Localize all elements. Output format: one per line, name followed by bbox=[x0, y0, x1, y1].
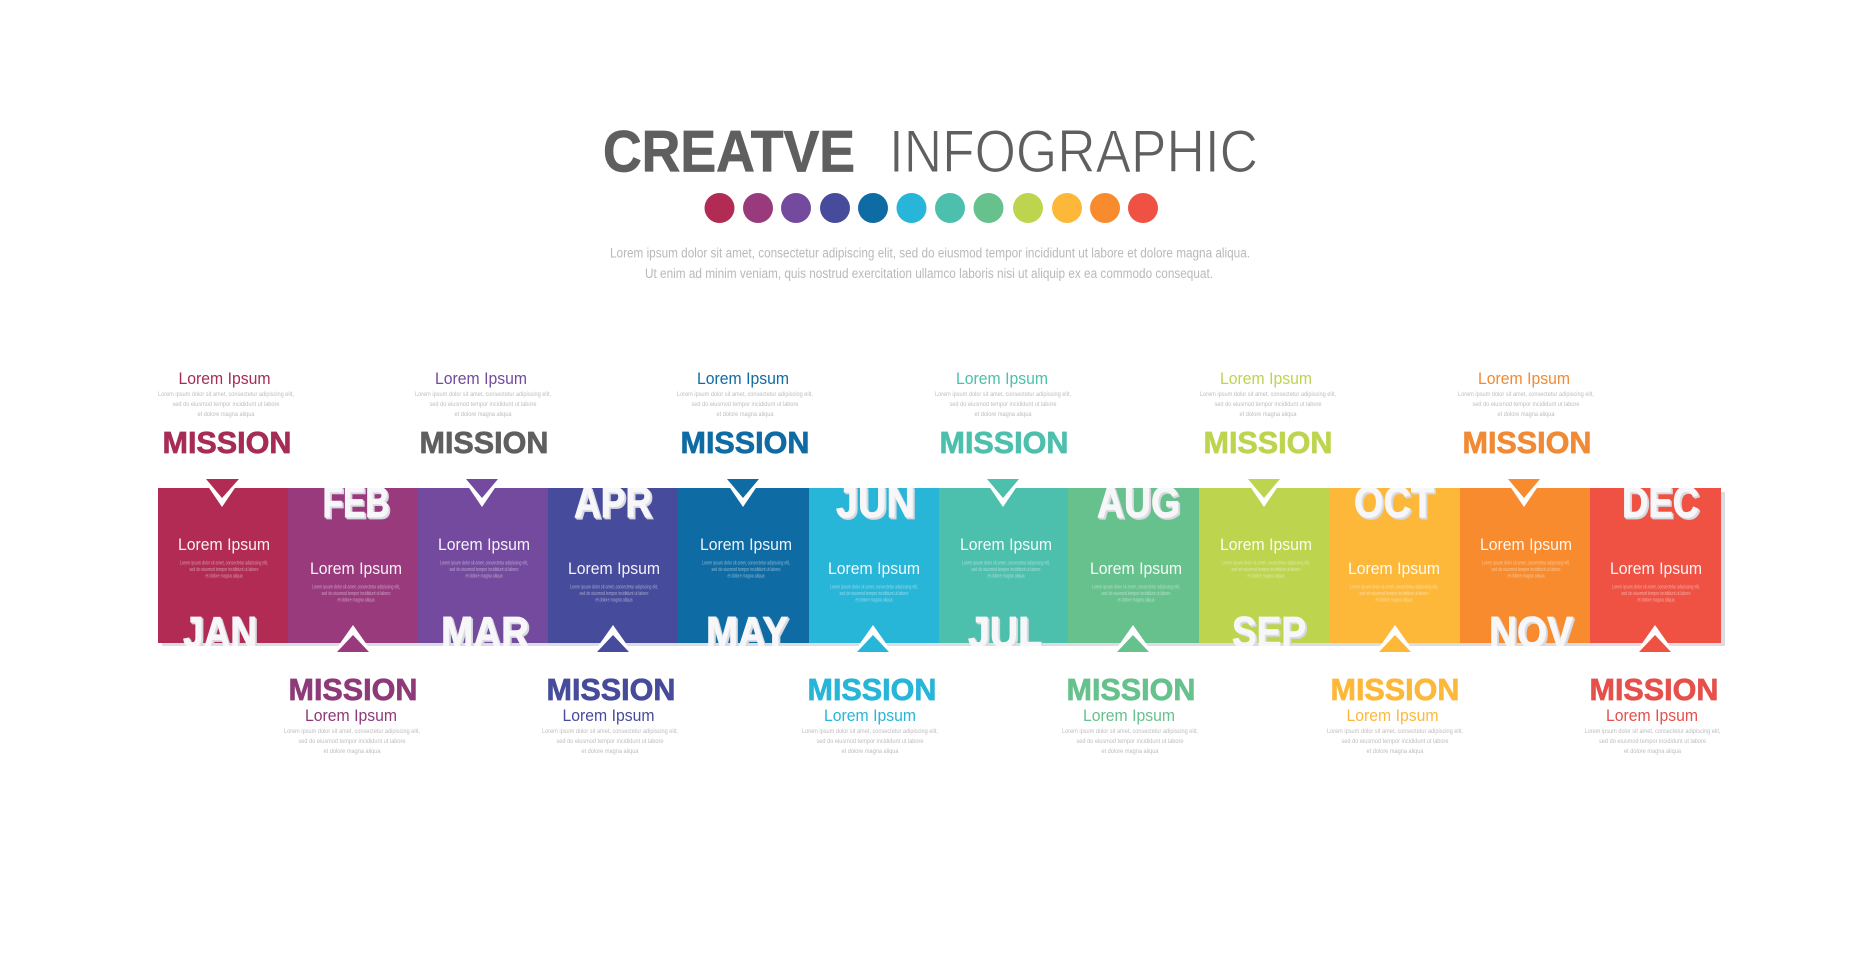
bottom callout: August: MISSION bbox=[1066, 672, 1196, 707]
top callout: July: sed do eiusmod tempor incididunt ut labore bbox=[950, 401, 1057, 408]
bottom callout: June: Lorem Ipsum bbox=[824, 706, 916, 725]
column inner text: sed do eiusmod tempor incididunt ut labore bbox=[1360, 591, 1429, 597]
bottom callout: February bbox=[284, 625, 420, 755]
column inner text: Lorem ipsum dolor sit amet, consectetur adipiscing elit, bbox=[570, 584, 658, 590]
colour dots row bbox=[704, 193, 1158, 223]
bottom callout: April: Lorem Ipsum bbox=[562, 706, 654, 725]
top callout: July: MISSION bbox=[940, 425, 1068, 460]
column inner text: sed do eiusmod tempor incididunt ut labore bbox=[322, 591, 391, 597]
subtitle text: Ut enim ad minim veniam, quis nostrud exercitation ullamco laboris nisi ut aliquip ex ea commodo consequat. bbox=[645, 266, 1213, 281]
column inner text: sed do eiusmod tempor incididunt ut labore bbox=[190, 567, 259, 573]
column inner text: sed do eiusmod tempor incididunt ut labore bbox=[972, 567, 1041, 573]
bottom callout: December bbox=[1584, 625, 1721, 755]
top callout: January: et dolore magna aliqua bbox=[198, 411, 255, 418]
month labels: FEB bbox=[322, 478, 390, 527]
column inner text: Lorem Ipsum bbox=[828, 559, 920, 578]
bottom callout: June: MISSION bbox=[808, 672, 936, 707]
column inner text: Lorem Ipsum bbox=[1348, 559, 1440, 578]
top callout: November: Lorem ipsum dolor sit amet, consectetur adipiscing elit, bbox=[1458, 391, 1594, 398]
top callout: January: Lorem ipsum dolor sit amet, consectetur adipiscing elit, bbox=[158, 391, 294, 398]
month labels: JUL bbox=[968, 608, 1042, 657]
month labels bbox=[183, 488, 1700, 646]
column inner text: Lorem Ipsum bbox=[1220, 535, 1312, 554]
bottom callout: February: Lorem ipsum dolor sit amet, consectetur adipiscing elit, bbox=[284, 728, 420, 735]
top callout: September: Lorem Ipsum bbox=[1220, 369, 1312, 388]
bottom callout: February: MISSION bbox=[288, 672, 418, 707]
column inner text: Lorem ipsum dolor sit amet, consectetur adipiscing elit, bbox=[962, 560, 1050, 566]
bottom callout: October: sed do eiusmod tempor incididunt ut labore bbox=[1342, 738, 1449, 745]
column inner text: sed do eiusmod tempor incididunt ut labore bbox=[1232, 567, 1301, 573]
bottom callout: August bbox=[1062, 625, 1198, 755]
top callout: January: Lorem Ipsum bbox=[178, 369, 270, 388]
top callout: May bbox=[677, 369, 813, 507]
bottom callout: October: et dolore magna aliqua bbox=[1366, 748, 1424, 755]
column inner text: sed do eiusmod tempor incididunt ut labore bbox=[450, 567, 519, 573]
bottom callout: June: Lorem ipsum dolor sit amet, consectetur adipiscing elit, bbox=[802, 728, 938, 735]
column inner text: Lorem ipsum dolor sit amet, consectetur adipiscing elit, bbox=[1482, 560, 1570, 566]
column inner text: Lorem ipsum dolor sit amet, consectetur adipiscing elit, bbox=[1350, 584, 1438, 590]
top callout: March: Lorem ipsum dolor sit amet, consectetur adipiscing elit, bbox=[415, 391, 551, 398]
column inner text: sed do eiusmod tempor incididunt ut labore bbox=[580, 591, 649, 597]
column inner text: Lorem Ipsum bbox=[700, 535, 792, 554]
top callout: November: sed do eiusmod tempor incididunt ut labore bbox=[1472, 401, 1580, 408]
column inner text: sed do eiusmod tempor incididunt ut labore bbox=[1622, 591, 1691, 597]
bottom callout: December: sed do eiusmod tempor incididunt ut labore bbox=[1599, 738, 1706, 745]
column inner text: et dolore magna aliqua bbox=[1248, 574, 1285, 580]
top callout: May: et dolore magna aliqua bbox=[716, 411, 774, 418]
column inner text: Lorem Ipsum bbox=[1480, 535, 1572, 554]
bottom callout: December: Lorem ipsum dolor sit amet, consectetur adipiscing elit, bbox=[1584, 728, 1721, 735]
top callout: May: sed do eiusmod tempor incididunt ut labore bbox=[692, 401, 799, 408]
bottom callout: April: et dolore magna aliqua bbox=[582, 748, 639, 755]
bottom callout: December: Lorem Ipsum bbox=[1606, 706, 1698, 725]
column inner text: sed do eiusmod tempor incididunt ut labore bbox=[712, 567, 781, 573]
bottom callout: April: Lorem ipsum dolor sit amet, consectetur adipiscing elit, bbox=[542, 728, 678, 735]
title: INFOGRAPHIC bbox=[889, 118, 1258, 185]
column inner text: Lorem Ipsum bbox=[960, 535, 1052, 554]
column inner text: et dolore magna aliqua bbox=[206, 574, 243, 580]
column inner text: Lorem Ipsum bbox=[1090, 559, 1182, 578]
top callout: January bbox=[158, 369, 294, 507]
month labels: OCT bbox=[1354, 478, 1434, 527]
column inner text: et dolore magna aliqua bbox=[1638, 598, 1675, 604]
column inner text: Lorem ipsum dolor sit amet, consectetur adipiscing elit, bbox=[180, 560, 268, 566]
top callout: July: Lorem Ipsum bbox=[956, 369, 1048, 388]
top callout: July: et dolore magna aliqua bbox=[974, 411, 1032, 418]
column inner text: et dolore magna aliqua bbox=[466, 574, 503, 580]
month labels: APR bbox=[574, 478, 652, 527]
column inner text: Lorem Ipsum bbox=[568, 559, 660, 578]
month labels: DEC bbox=[1622, 478, 1699, 527]
top callout: March: et dolore magna aliqua bbox=[454, 411, 512, 418]
top callout: September: et dolore magna aliqua bbox=[1240, 411, 1297, 418]
top callout: May: Lorem ipsum dolor sit amet, consectetur adipiscing elit, bbox=[677, 391, 813, 398]
column inner text: et dolore magna aliqua bbox=[338, 598, 375, 604]
bottom callout: February: Lorem Ipsum bbox=[305, 706, 397, 725]
column inner text: et dolore magna aliqua bbox=[1118, 598, 1155, 604]
column inner text: Lorem ipsum dolor sit amet, consectetur adipiscing elit, bbox=[702, 560, 790, 566]
column inner text: et dolore magna aliqua bbox=[856, 598, 893, 604]
top callout: March: sed do eiusmod tempor incididunt ut labore bbox=[430, 401, 537, 408]
bottom callout: August: sed do eiusmod tempor incididunt ut labore bbox=[1076, 738, 1184, 745]
top callout: March bbox=[415, 369, 551, 507]
month labels: JUN bbox=[836, 478, 915, 527]
top callout: January: sed do eiusmod tempor incididunt ut labore bbox=[172, 401, 280, 408]
column inner text: et dolore magna aliqua bbox=[988, 574, 1025, 580]
bottom callout: August: Lorem Ipsum bbox=[1083, 706, 1175, 725]
top callout: November: Lorem Ipsum bbox=[1478, 369, 1570, 388]
column inner text bbox=[178, 535, 1702, 604]
title: CREATVE bbox=[603, 120, 855, 184]
column inner text: Lorem Ipsum bbox=[1610, 559, 1702, 578]
top callout: March: MISSION bbox=[420, 425, 548, 460]
column inner text: Lorem Ipsum bbox=[178, 535, 270, 554]
column inner text: Lorem ipsum dolor sit amet, consectetur adipiscing elit, bbox=[1092, 584, 1180, 590]
top callout: November bbox=[1458, 369, 1594, 507]
column inner text: et dolore magna aliqua bbox=[728, 574, 765, 580]
column inner text: Lorem ipsum dolor sit amet, consectetur adipiscing elit, bbox=[830, 584, 918, 590]
bottom callout: April: sed do eiusmod tempor incididunt ut labore bbox=[556, 738, 664, 745]
column inner text: sed do eiusmod tempor incididunt ut labore bbox=[1492, 567, 1561, 573]
top callout: May: MISSION bbox=[680, 425, 810, 460]
bottom callout: June: sed do eiusmod tempor incididunt ut labore bbox=[816, 738, 924, 745]
subtitle text: Lorem ipsum dolor sit amet, consectetur adipiscing elit, sed do eiusmod tempor incididunt ut labore et dolore magna aliqua. bbox=[610, 246, 1250, 260]
column inner text: sed do eiusmod tempor incididunt ut labore bbox=[1102, 591, 1171, 597]
top callout: September bbox=[1200, 369, 1336, 507]
month labels: MAR bbox=[441, 608, 529, 657]
bar shadow bbox=[162, 492, 1725, 646]
bottom callout: February: sed do eiusmod tempor incididunt ut labore bbox=[298, 738, 406, 745]
top callout: July: Lorem ipsum dolor sit amet, consectetur adipiscing elit, bbox=[935, 391, 1071, 398]
bottom callout: April bbox=[542, 625, 678, 755]
month labels: SEP bbox=[1232, 608, 1306, 657]
top callout: May: Lorem Ipsum bbox=[697, 369, 789, 388]
bottom callout: June bbox=[802, 625, 938, 755]
top callout: September: Lorem ipsum dolor sit amet, consectetur adipiscing elit, bbox=[1200, 391, 1336, 398]
column inner text: sed do eiusmod tempor incididunt ut labore bbox=[840, 591, 909, 597]
column inner text: Lorem ipsum dolor sit amet, consectetur adipiscing elit, bbox=[440, 560, 528, 566]
bottom callout: June: et dolore magna aliqua bbox=[842, 748, 899, 755]
column inner text: Lorem ipsum dolor sit amet, consectetur adipiscing elit, bbox=[1612, 584, 1700, 590]
top callout: November: MISSION bbox=[1462, 425, 1592, 460]
bottom callout: October: Lorem Ipsum bbox=[1346, 706, 1438, 725]
month columns bbox=[158, 488, 1721, 643]
top callout: July bbox=[935, 369, 1071, 507]
column inner text: Lorem Ipsum bbox=[310, 559, 402, 578]
title bbox=[603, 118, 1258, 185]
bottom callout: October bbox=[1327, 625, 1463, 755]
top callout: September: sed do eiusmod tempor incididunt ut labore bbox=[1214, 401, 1322, 408]
bottom callout: October: Lorem ipsum dolor sit amet, consectetur adipiscing elit, bbox=[1327, 728, 1463, 735]
bottom callout: April: MISSION bbox=[546, 672, 676, 707]
month labels: NOV bbox=[1489, 608, 1574, 657]
bottom callout: October: MISSION bbox=[1330, 672, 1460, 707]
subtitle text bbox=[610, 246, 1250, 281]
bottom callout: December: et dolore magna aliqua bbox=[1624, 748, 1681, 755]
bottom callout: December: MISSION bbox=[1590, 672, 1718, 707]
top callout: January: MISSION bbox=[162, 425, 292, 460]
month labels: JAN bbox=[183, 608, 257, 657]
column inner text: Lorem ipsum dolor sit amet, consectetur adipiscing elit, bbox=[312, 584, 400, 590]
column inner text: Lorem Ipsum bbox=[438, 535, 530, 554]
month labels: MAY bbox=[706, 608, 788, 657]
bottom callout: February: et dolore magna aliqua bbox=[324, 748, 381, 755]
top callout: November: et dolore magna aliqua bbox=[1498, 411, 1555, 418]
timeline bar bbox=[158, 488, 1725, 646]
column inner text: et dolore magna aliqua bbox=[1508, 574, 1545, 580]
top callout: March: Lorem Ipsum bbox=[435, 369, 527, 388]
column inner text: Lorem ipsum dolor sit amet, consectetur adipiscing elit, bbox=[1222, 560, 1310, 566]
column inner text: et dolore magna aliqua bbox=[1376, 598, 1413, 604]
column inner text: et dolore magna aliqua bbox=[596, 598, 633, 604]
bottom callout: August: Lorem ipsum dolor sit amet, consectetur adipiscing elit, bbox=[1062, 728, 1198, 735]
top callout: September: MISSION bbox=[1204, 425, 1332, 460]
month labels: AUG bbox=[1097, 478, 1180, 527]
bottom callout: August: et dolore magna aliqua bbox=[1102, 748, 1159, 755]
